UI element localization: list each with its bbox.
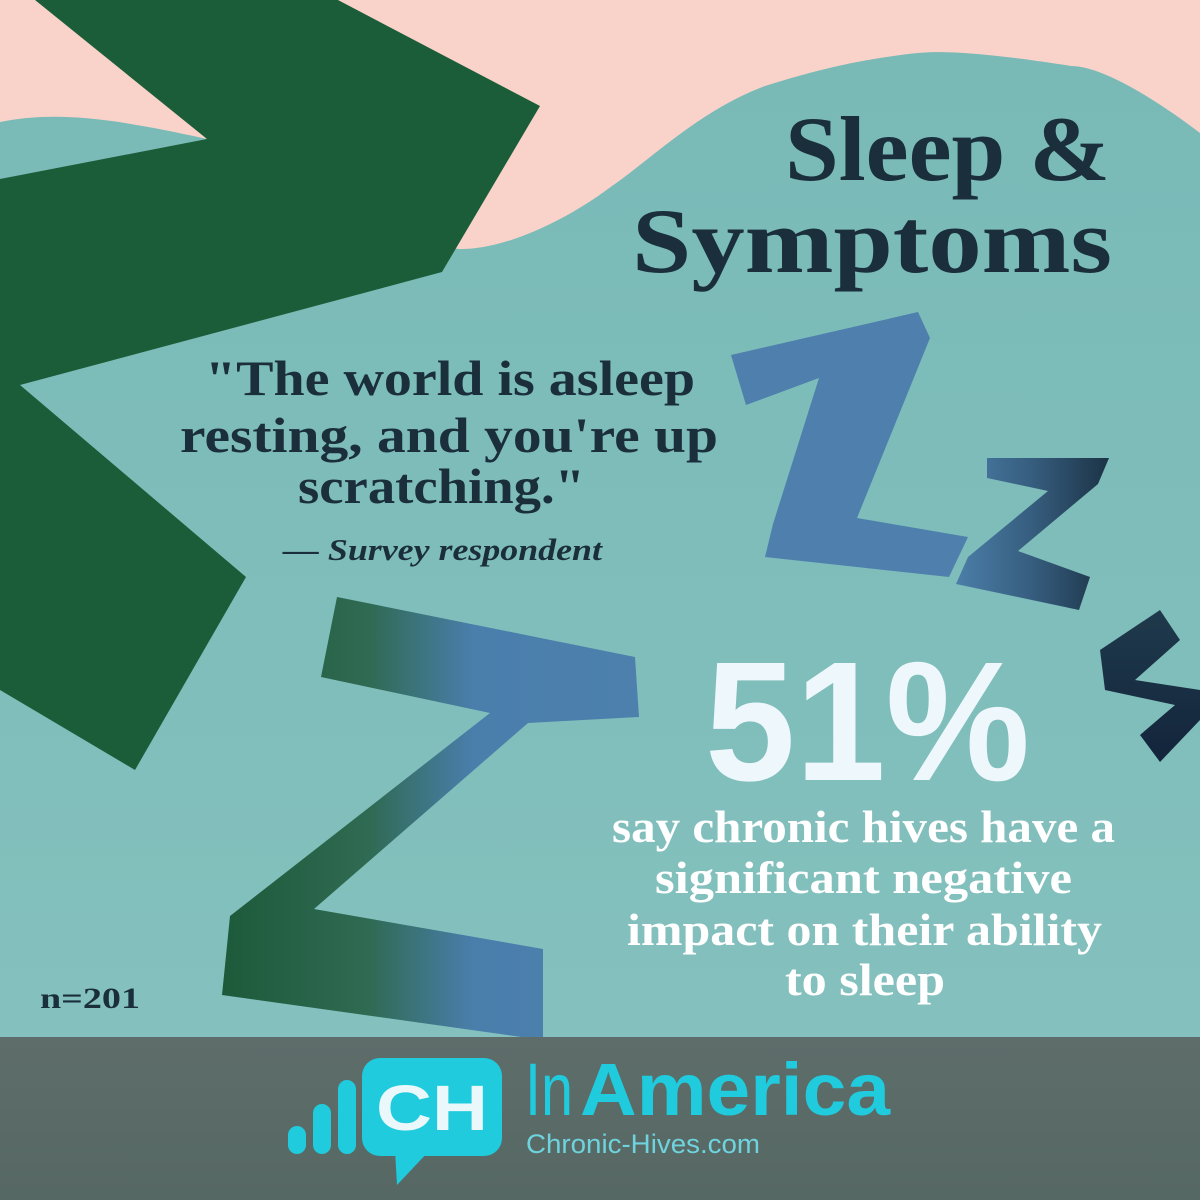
title: Symptoms: [632, 190, 1112, 292]
icon: CH speech bubble: [362, 1058, 502, 1185]
title: Sleep &: [785, 98, 1110, 200]
quote: scratching.": [298, 458, 585, 514]
icon: CH speech bubble: CH: [376, 1072, 488, 1144]
quote: "The world is asleep: [205, 350, 695, 406]
quote: [180, 350, 718, 567]
brand name: America: [580, 1048, 891, 1131]
attribution: — Survey respondent: [282, 532, 604, 567]
stat description: significant negative: [655, 853, 1072, 903]
medium blue Z: [731, 312, 968, 577]
brand name: In: [525, 1048, 573, 1131]
sample size: n=201: [40, 982, 140, 1015]
footer band: [0, 1037, 1200, 1200]
pink top background wave: [0, 0, 1200, 249]
far right navy Z: [1100, 610, 1200, 762]
website: Chronic-Hives.com: [526, 1129, 760, 1159]
quote: resting, and you're up: [180, 407, 718, 463]
icon: signal bars: [288, 1080, 356, 1154]
small blue-navy Z: [956, 458, 1109, 610]
stat description: to sleep: [785, 955, 945, 1005]
logo: [288, 1048, 891, 1185]
stat description: impact on their ability: [627, 905, 1103, 955]
stat description: [612, 802, 1115, 1005]
stat description: say chronic hives have a: [612, 802, 1115, 852]
large blue Z bottom: [222, 597, 639, 1040]
big green Z left: [0, 0, 540, 770]
title: [632, 98, 1112, 292]
stat 51%: 51%: [705, 627, 1030, 817]
